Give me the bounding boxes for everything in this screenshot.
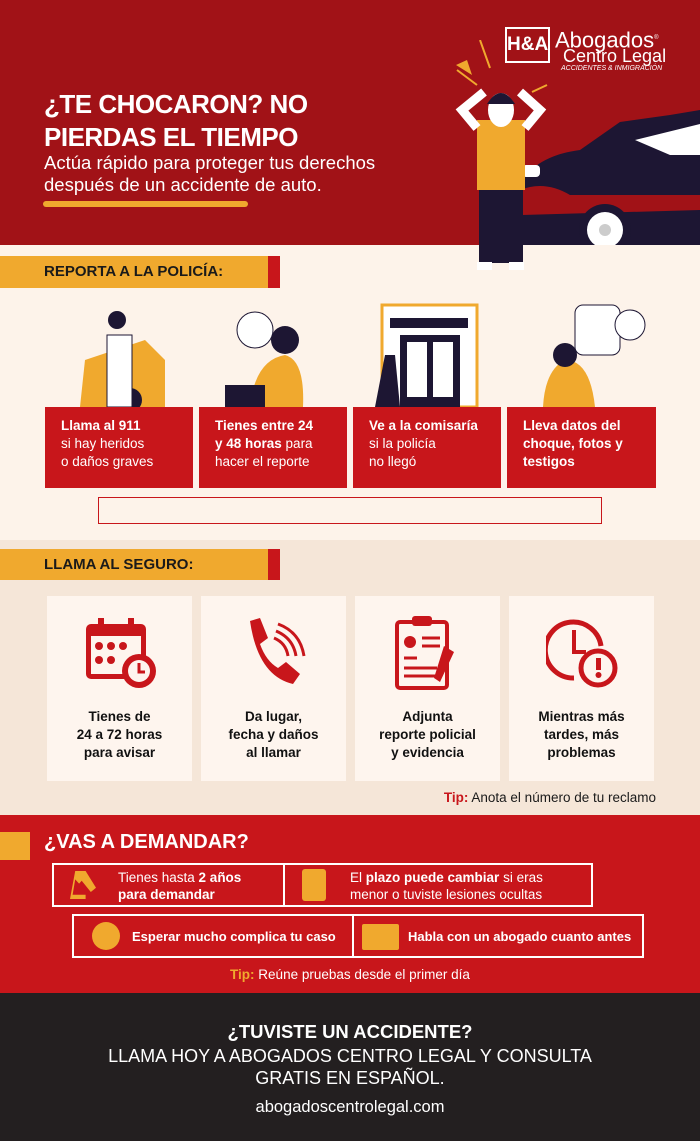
title: ¿TE CHOCARON? NO: [44, 89, 308, 119]
website: abogadoscentrolegal.com: [256, 1098, 444, 1116]
card: 24 y 48 horas: hacer el reporte: [215, 454, 310, 469]
card: comisaría: no llegó: [369, 454, 416, 469]
tip: Tip: Reúne pruebas desde el primer día: [230, 967, 470, 982]
card: clock warning: problemas: [547, 745, 616, 760]
card: report: reporte policial: [379, 727, 476, 742]
card: clock warning: [509, 596, 654, 781]
card: report: y evidencia: [391, 745, 464, 760]
card: calendar: [47, 596, 192, 781]
header: [0, 0, 700, 245]
card: report: [355, 596, 500, 781]
card: report: Adjunta: [402, 709, 453, 724]
card: llama al 911: si hay heridos: [61, 436, 144, 451]
card: phone: fecha y daños: [228, 727, 319, 742]
card: lleva datos: choque, fotos y: [523, 436, 623, 451]
section: reporta a la policía: [0, 245, 700, 540]
tip: Tip: Anota el número de tu reclamo: [444, 790, 656, 805]
illustration: car: [523, 110, 700, 245]
underline: [43, 201, 248, 207]
box row 1: para demandar: [118, 887, 215, 902]
card: comisaría: Ve a la comisaría: [369, 418, 478, 433]
subtitle: [44, 152, 375, 195]
card: clock warning: tardes, más: [544, 727, 619, 742]
card: comisaría: si la policía: [369, 436, 436, 451]
card: phone: [201, 596, 346, 781]
box row 2: Habla con un abogado cuanto antes: [408, 929, 631, 944]
logo: [505, 27, 666, 72]
box row 1: El plazo puede cambiar si eras: [350, 870, 543, 885]
card: calendar: 24 a 72 horas: [77, 727, 162, 742]
footer text: GRATIS EN ESPAÑOL.: [255, 1068, 445, 1088]
title: PIERDAS EL TIEMPO: [44, 122, 298, 152]
heading bar: [0, 549, 268, 580]
card: llama al 911: Llama al 911: [61, 418, 141, 433]
box row 2: Esperar mucho complica tu caso: [132, 929, 336, 944]
card: calendar: para avisar: [84, 745, 155, 760]
heading bar: [0, 256, 268, 288]
subtitle: Actúa rápido para proteger tus derechos: [44, 152, 375, 173]
footer: [0, 993, 700, 1141]
card: clock warning: Mientras más: [538, 709, 625, 724]
box row 1: Tienes hasta 2 años: [118, 870, 241, 885]
box row 1: [52, 863, 593, 907]
empty outlined box: [98, 497, 602, 524]
card: phone: al llamar: [246, 745, 301, 760]
logo: Abogados®: [555, 27, 659, 52]
title: [44, 89, 308, 152]
heading bar: REPORTA A LA POLICÍA:: [44, 263, 223, 280]
illustration: person: [456, 40, 548, 270]
card: phone: Da lugar,: [245, 709, 302, 724]
logo: H&A: [507, 34, 548, 55]
subtitle: después de un accidente de auto.: [44, 174, 322, 195]
card: 24 y 48 horas: y 48 horas para: [215, 436, 313, 451]
card: 24 y 48 horas: [199, 407, 347, 488]
heading bar: LLAMA AL SEGURO:: [44, 556, 193, 573]
heading: ¿VAS A DEMANDAR?: [44, 831, 249, 853]
card: comisaría: [353, 407, 501, 488]
card: 24 y 48 horas: Tienes entre 24: [215, 418, 313, 433]
card: llama al 911: o daños graves: [61, 454, 153, 469]
section: llama al seguro: [0, 540, 700, 815]
illustration: person, crash, police station, thinking: [80, 304, 646, 407]
box row 1: menor o tuviste lesiones ocultas: [350, 887, 542, 902]
box row 2: [72, 914, 644, 958]
footer text: LLAMA HOY A ABOGADOS CENTRO LEGAL Y CONSULTA: [108, 1046, 592, 1066]
card: calendar: Tienes de: [88, 709, 151, 724]
logo: ACCIDENTES & INMIGRACIÓN: [561, 65, 662, 72]
section: vas a demandar: [0, 815, 700, 993]
logo: Centro Legal: [563, 46, 666, 66]
footer text: [108, 1046, 592, 1088]
card: llama al 911: [45, 407, 193, 488]
card: lleva datos: Lleva datos del: [523, 418, 621, 433]
card: lleva datos: testigos: [523, 454, 575, 469]
footer heading: ¿TUVISTE UN ACCIDENTE?: [228, 1021, 472, 1042]
card: lleva datos: [507, 407, 656, 488]
